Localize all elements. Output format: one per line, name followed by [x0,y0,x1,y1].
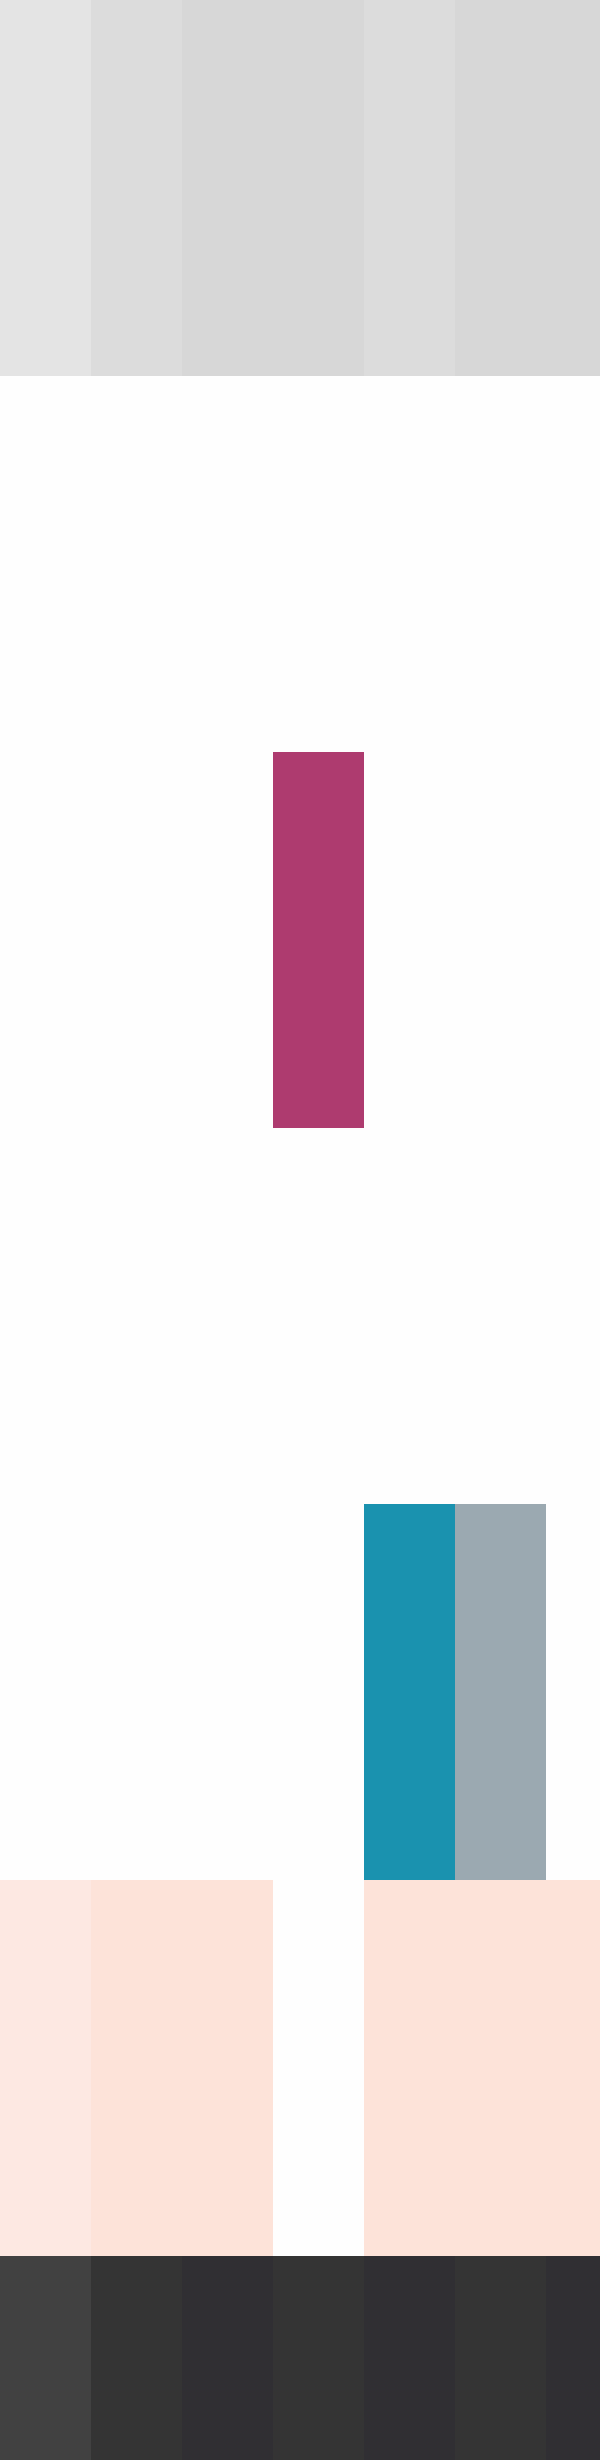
accent block: magenta [273,752,364,1128]
footer block 5 [364,2256,455,2460]
footer block 3 [182,2256,273,2460]
header block 1 [0,0,91,376]
panel: pink band right [364,1880,600,2256]
panel: footer [0,2256,600,2460]
header block 2 [91,0,182,376]
panel: pink band left [0,1880,273,2256]
accent block: teal [364,1504,455,1880]
header block 5 [364,0,455,376]
footer block 7 [546,2256,600,2460]
panel: header band [0,0,600,376]
pink block light [0,1880,91,2256]
accent block: slate [455,1504,546,1880]
footer block 1 [0,2256,91,2460]
